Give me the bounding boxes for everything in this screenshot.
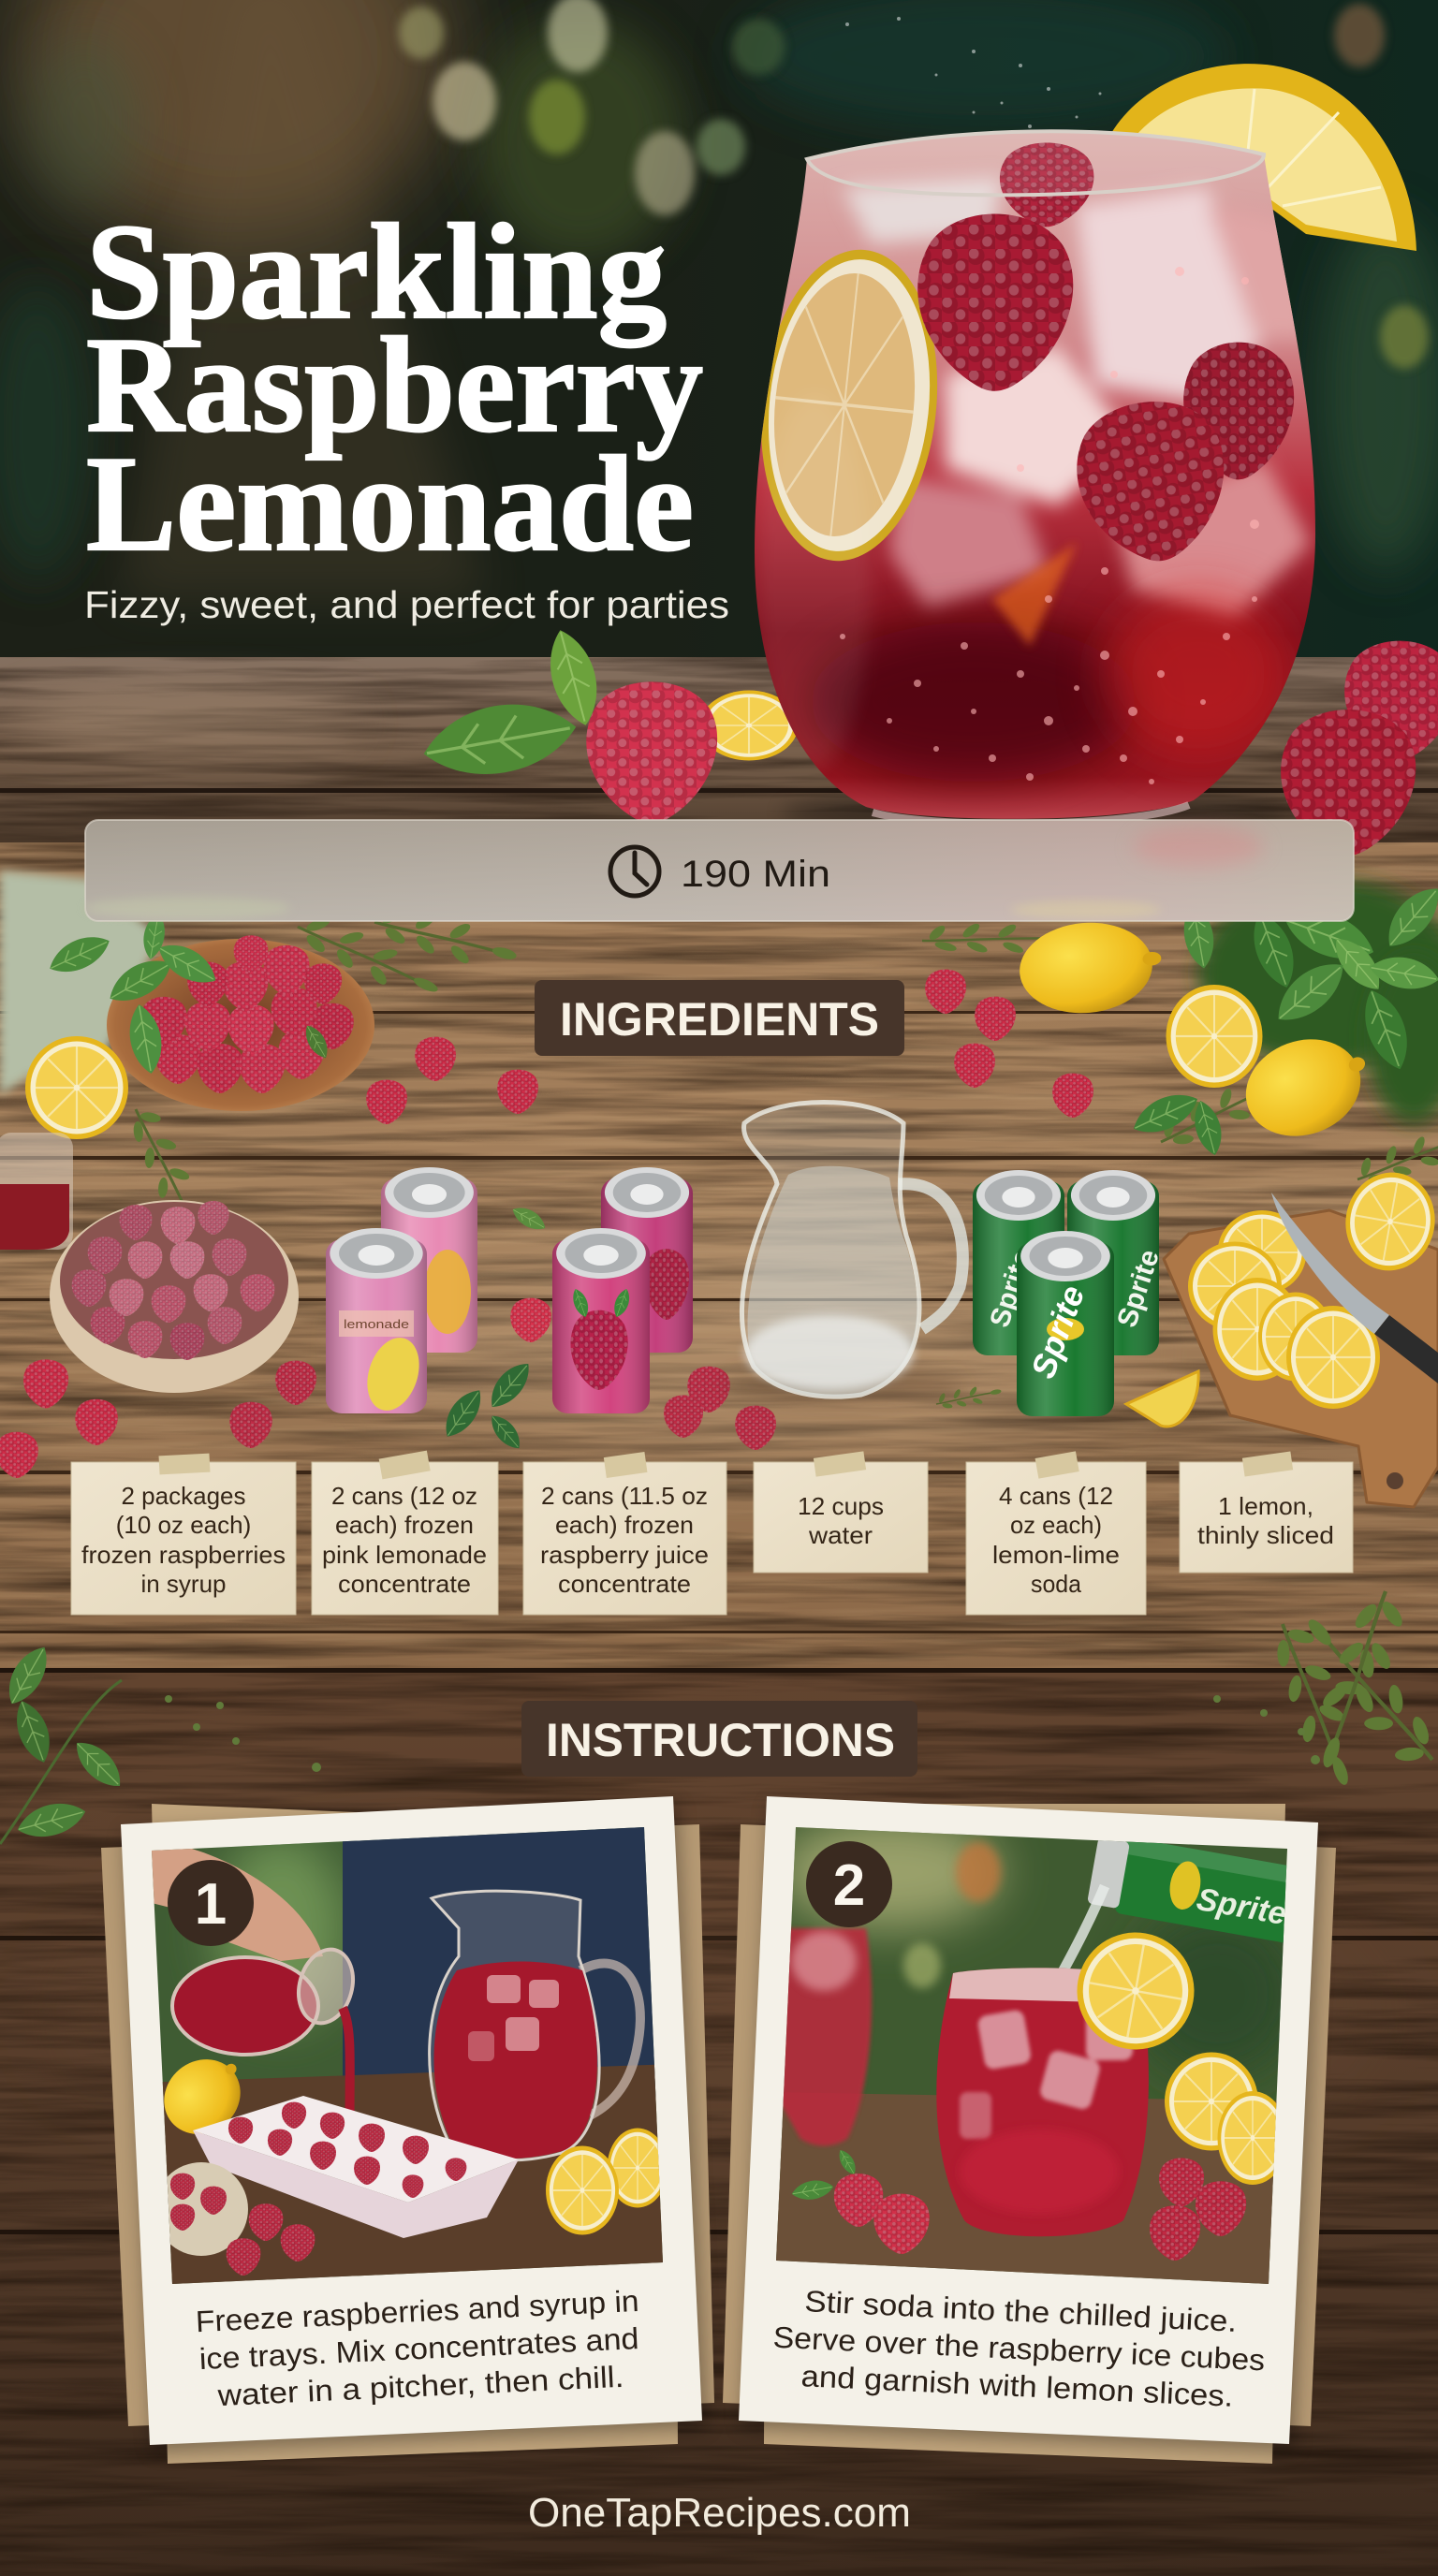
note: raspberries: 2 packages xyxy=(122,1482,245,1510)
note: raspberry juice: concentrate xyxy=(558,1570,691,1598)
time bar xyxy=(84,820,1354,921)
lemon slice in glass xyxy=(761,249,938,562)
step 2 text: and garnish with lemon slices. xyxy=(800,2359,1234,2413)
raspberries in glass xyxy=(1000,142,1093,227)
hero raspberry and mint garnish xyxy=(418,624,798,824)
instructions wood background xyxy=(0,1668,1438,2576)
title: Raspberry xyxy=(86,309,703,461)
note: raspberries xyxy=(71,1454,296,1615)
step 1 text: Freeze raspberries and syrup in xyxy=(195,2284,639,2338)
note: raspberries: frozen raspberries xyxy=(81,1541,286,1569)
herbs lower right xyxy=(1213,1588,1438,1791)
step 1 text: ice trays. Mix concentrates and xyxy=(198,2321,639,2376)
note: raspberries: (10 oz each) xyxy=(116,1511,251,1539)
soda can: Sprite xyxy=(1194,1881,1289,1932)
raspberry juice cans xyxy=(552,1167,693,1413)
kraft paper backing xyxy=(723,1804,1336,2464)
sprite cans xyxy=(973,1170,1166,1416)
number badge 1: 1 xyxy=(195,1872,227,1937)
pink lemonade cans: lemonade xyxy=(344,1317,409,1331)
instructions heading: INSTRUCTIONS xyxy=(546,1714,895,1766)
cook time: 190 Min xyxy=(681,854,830,895)
title xyxy=(86,196,703,579)
subtitle: Fizzy, sweet, and perfect for parties xyxy=(84,583,729,626)
frozen raspberries bowl xyxy=(50,1200,299,1393)
pitcher of juice xyxy=(430,1891,640,2160)
note: pink lemonade: concentrate xyxy=(338,1570,471,1598)
note: soda: soda xyxy=(1031,1570,1082,1598)
number badge 1 xyxy=(168,1860,254,1946)
note: soda: oz each) xyxy=(1010,1511,1102,1539)
note: soda: 4 cans (12 xyxy=(999,1482,1113,1510)
ingredients heading: INGREDIENTS xyxy=(560,993,879,1046)
note: raspberry juice: 2 cans (11.5 oz xyxy=(541,1482,708,1510)
ingredients decorations top left xyxy=(0,871,374,1250)
greens and lemons top right xyxy=(1016,878,1438,1219)
syrup jar xyxy=(170,1947,356,2111)
hero right raspberries xyxy=(1281,641,1438,856)
note: soda: lemon-lime xyxy=(992,1541,1120,1569)
syrup glass xyxy=(0,1133,73,1250)
note: raspberry juice xyxy=(523,1452,726,1615)
note: lemon: 1 lemon, xyxy=(1218,1492,1313,1520)
dark syrup and bubbles xyxy=(810,622,1137,782)
ingredients wood background xyxy=(0,842,1438,1671)
number badge 2: 2 xyxy=(833,1853,865,1918)
step card 1 xyxy=(101,1796,714,2464)
note: lemon xyxy=(1180,1451,1353,1573)
knife xyxy=(1271,1193,1438,1383)
note: water: water xyxy=(808,1521,873,1549)
note: pink lemonade: pink lemonade xyxy=(322,1541,487,1569)
loose herbs upper xyxy=(97,877,1284,1233)
ingredients heading xyxy=(535,980,904,1056)
ingredient notes xyxy=(71,1451,1353,1615)
cutting board with sliced lemon and knife xyxy=(1164,1165,1438,1507)
footer website: OneTapRecipes.com xyxy=(528,2490,911,2536)
step 1 text xyxy=(195,2284,643,2413)
step 2 text xyxy=(770,2283,1268,2414)
hero background xyxy=(0,0,1438,660)
lemon wedge on rim xyxy=(1093,64,1416,251)
note: raspberry juice: each) frozen xyxy=(555,1511,694,1539)
water pitcher xyxy=(721,1103,964,1404)
glass with ice xyxy=(936,1968,1149,2236)
photo: pouring soda over ice xyxy=(768,1816,1312,2293)
note: pink lemonade: each) frozen xyxy=(335,1511,474,1539)
sprite cans: Sprite xyxy=(1023,1281,1092,1383)
spray of bubbles above glass xyxy=(845,17,1101,128)
note: lemon: thinly sliced xyxy=(1197,1521,1334,1549)
hero glass of sparkling raspberry lemonade xyxy=(740,122,1339,833)
title: Lemonade xyxy=(86,428,694,579)
soda can xyxy=(1086,1832,1312,1945)
note: water xyxy=(754,1451,928,1573)
loose raspberries upper xyxy=(366,970,1093,1124)
herbs lower left xyxy=(0,1640,321,1844)
pink lemonade cans xyxy=(326,1167,477,1417)
mint and raspberries around cans xyxy=(0,1202,1004,1478)
lemon half xyxy=(25,1036,128,1139)
small bowl of raspberries xyxy=(154,2162,248,2256)
sprite cans: Sprite xyxy=(984,1246,1038,1331)
step card 2 xyxy=(723,1796,1336,2464)
ice cubes xyxy=(843,178,1311,618)
note: water: 12 cups xyxy=(798,1492,884,1520)
ice tray xyxy=(193,2096,519,2238)
number badge 2 xyxy=(806,1841,892,1927)
note: raspberry juice: raspberry juice xyxy=(540,1541,709,1569)
icon: clock xyxy=(610,847,659,896)
note: soda xyxy=(966,1451,1146,1615)
hero table wood xyxy=(0,657,1438,844)
step 1 text: water in a pitcher, then chill. xyxy=(216,2360,624,2412)
sprite cans: Sprite xyxy=(1111,1246,1166,1331)
glass rim xyxy=(807,131,1264,195)
note: raspberries: in syrup xyxy=(140,1570,227,1598)
wooden bowl of raspberries xyxy=(44,911,374,1111)
title: Sparkling xyxy=(86,196,667,347)
note: pink lemonade xyxy=(312,1451,498,1615)
photo: pouring syrup into ice trays xyxy=(152,1827,663,2284)
instructions heading xyxy=(521,1701,917,1777)
step 2 text: Stir soda into the chilled juice. xyxy=(804,2284,1238,2338)
note: pink lemonade: 2 cans (12 oz xyxy=(331,1482,477,1510)
background glass xyxy=(777,1928,872,2145)
lemon wedge on table xyxy=(1126,1371,1198,1427)
kraft paper backing xyxy=(101,1804,714,2464)
step 2 text: Serve over the raspberry ice cubes xyxy=(772,2320,1266,2377)
